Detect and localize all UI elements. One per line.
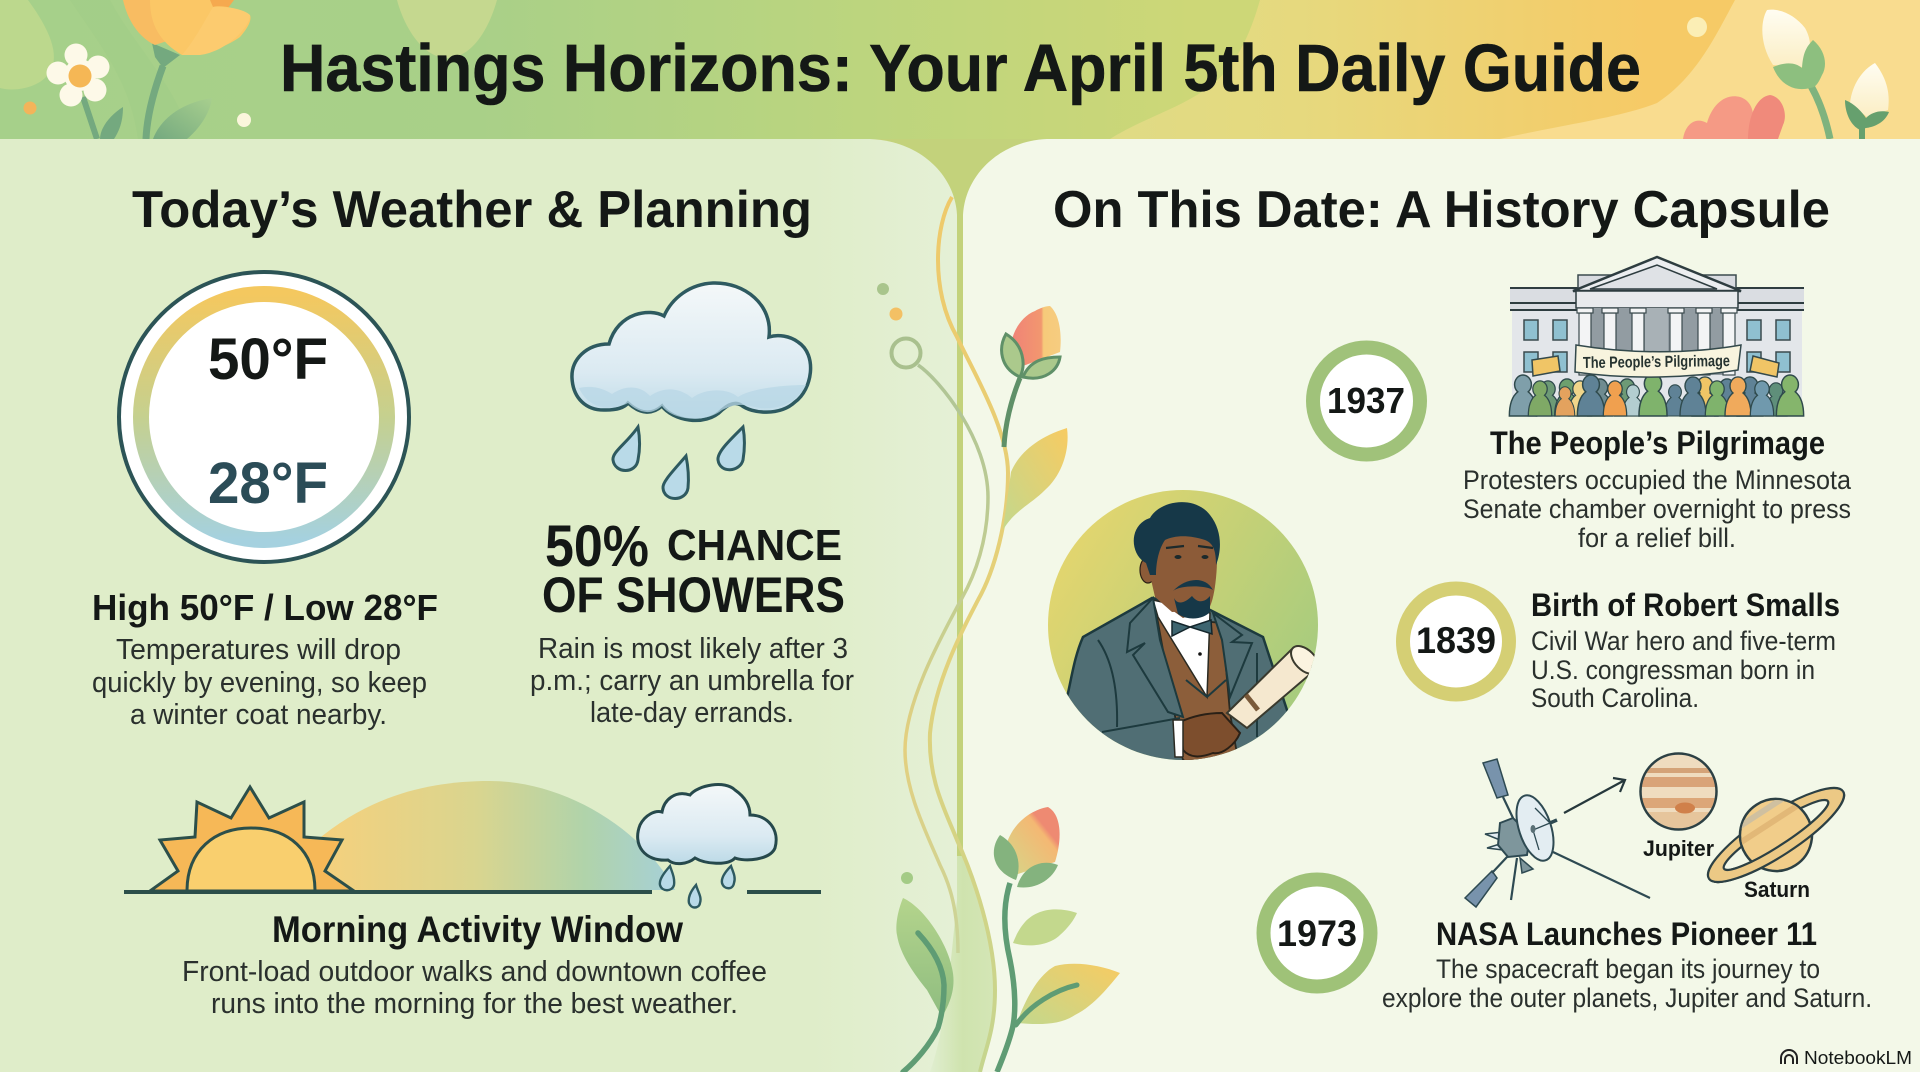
year badge 1937: 1937 xyxy=(1327,380,1405,421)
temperature text: Temperatures will drop xyxy=(116,634,401,666)
crowd xyxy=(1509,374,1804,416)
temperature dial: 28°F xyxy=(208,451,328,516)
decorative dots left xyxy=(24,102,251,127)
year badge 1839 xyxy=(1403,588,1509,694)
event text 1839: Civil War hero and five-term xyxy=(1531,626,1836,656)
temperature text: quickly by evening, so keep xyxy=(92,667,427,699)
event text 1973: explore the outer planets, Jupiter and Saturn. xyxy=(1382,983,1872,1013)
icon: Pioneer spacecraft xyxy=(1465,759,1650,907)
morning text xyxy=(182,956,767,1020)
icon: white daisy xyxy=(46,44,123,139)
event text 1973: The spacecraft began its journey to xyxy=(1436,954,1820,984)
temperature text: a winter coat nearby. xyxy=(130,699,387,731)
label: Saturn: Saturn xyxy=(1744,877,1810,902)
panel: today's weather and planning xyxy=(0,139,957,1072)
event text 1937: Senate chamber overnight to press xyxy=(1463,494,1851,524)
banner xyxy=(1575,345,1741,377)
morning heading: Morning Activity Window xyxy=(272,909,683,950)
event heading 1937: The People’s Pilgrimage xyxy=(1490,425,1825,461)
icon: Jupiter xyxy=(1640,754,1720,832)
icon: small white bud xyxy=(1845,63,1889,139)
ring ornament xyxy=(892,338,920,368)
event heading 1973: NASA Launches Pioneer 11 xyxy=(1436,916,1817,952)
morning text: Front-load outdoor walks and downtown coffee xyxy=(182,956,767,988)
heading: weather: Today’s Weather & Planning xyxy=(132,181,812,239)
heading: history: On This Date: A History Capsule xyxy=(1053,181,1830,239)
temperature dial xyxy=(119,272,409,562)
event text 1973 xyxy=(1382,954,1872,1013)
icon: rain cloud xyxy=(572,283,811,498)
morning text: runs into the morning for the best weather. xyxy=(211,988,738,1020)
icon: orange tulip xyxy=(123,0,251,139)
banner: The People’s Pilgrimage xyxy=(1583,353,1730,372)
icon: coral petals xyxy=(1683,95,1785,139)
icon: Saturn xyxy=(1706,786,1846,884)
icon: white bud with stem xyxy=(1762,10,1830,139)
event text 1839: South Carolina. xyxy=(1531,683,1699,713)
rain chance headline xyxy=(542,514,845,623)
decorative dot right xyxy=(1687,17,1707,37)
label: Jupiter: Jupiter xyxy=(1643,836,1714,861)
temperature text xyxy=(92,634,427,731)
event text 1937: for a relief bill. xyxy=(1578,523,1736,553)
gutter behind panels xyxy=(860,139,1060,1072)
rain text: late-day errands. xyxy=(590,697,794,729)
rain chance headline: OF SHOWERS xyxy=(542,567,845,623)
temperature heading: High 50°F / Low 28°F xyxy=(92,587,438,628)
event text 1937: Protesters occupied the Minnesota xyxy=(1463,465,1852,495)
temperature dial: 50°F xyxy=(208,327,328,392)
big left leaf xyxy=(896,898,954,1072)
logo: NotebookLM: NotebookLM xyxy=(1804,1048,1912,1068)
rain chance headline: 50% xyxy=(545,514,649,579)
rain chance headline: CHANCE xyxy=(667,521,842,570)
event text 1937 xyxy=(1463,465,1852,553)
illustration: capitol protest xyxy=(1509,257,1804,416)
yellow vine xyxy=(930,197,1008,1072)
soft lower band between panels xyxy=(930,856,995,1072)
sage vine xyxy=(905,365,988,953)
event text 1839: U.S. congressman born in xyxy=(1531,655,1815,685)
rain text: Rain is most likely after 3 xyxy=(538,633,848,665)
panel: on this date history capsule xyxy=(963,139,1920,1072)
year badge 1973: 1973 xyxy=(1277,913,1357,954)
rain text xyxy=(530,633,854,729)
year badge 1973 xyxy=(1264,880,1370,986)
dots xyxy=(877,283,913,884)
header band background xyxy=(0,0,1920,139)
year badge 1839: 1839 xyxy=(1416,620,1496,661)
title: Hastings Horizons: Your April 5th Daily Guide xyxy=(280,31,1641,106)
lower flower xyxy=(994,807,1120,1072)
event text 1839 xyxy=(1531,626,1836,713)
upper flower xyxy=(1002,306,1068,530)
rain text: p.m.; carry an umbrella for xyxy=(530,665,854,697)
year badge 1937 xyxy=(1313,348,1420,454)
sun to rain chart xyxy=(124,781,821,908)
central vines xyxy=(877,197,1120,1072)
portrait: Robert Smalls xyxy=(1040,490,1324,770)
event heading 1839: Birth of Robert Smalls xyxy=(1531,587,1840,623)
